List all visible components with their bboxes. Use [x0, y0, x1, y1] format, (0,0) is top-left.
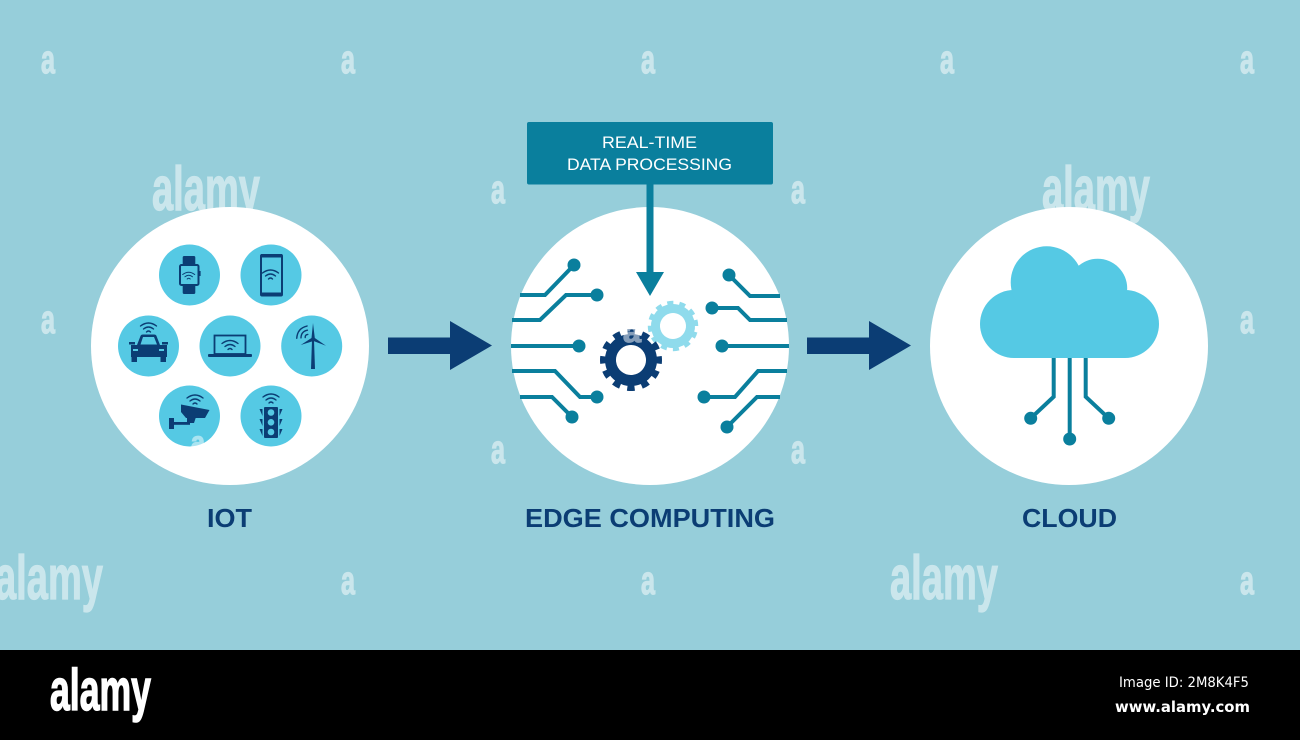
watermarks: a [191, 426, 205, 459]
watermarks [0, 38, 1254, 613]
icon: connected car [118, 316, 179, 376]
watermarks behind circles: alamy [152, 155, 260, 224]
circuit lines right [698, 268, 789, 434]
panel: IoT circle [91, 207, 369, 485]
icon: laptop [200, 316, 260, 376]
watermarks: a [940, 38, 954, 82]
icon: traffic light [240, 386, 302, 446]
icon: dark gear [600, 329, 662, 391]
watermarks behind circles [152, 155, 1150, 224]
watermarks: a [1240, 559, 1254, 603]
watermarks: a [341, 38, 355, 82]
watermarks: alamy [0, 544, 103, 613]
footer bar [0, 650, 1300, 740]
watermarks: a [623, 316, 641, 349]
cloud connectors [1024, 358, 1115, 446]
arrow: callout to gears [636, 184, 664, 296]
label: edge computing: EDGE COMPUTING [525, 503, 775, 533]
icon: security camera [159, 386, 220, 446]
label: cloud: CLOUD [1022, 503, 1117, 533]
icon: smartphone [240, 244, 302, 306]
watermarks: a [341, 559, 355, 603]
callout: real-time data processing: DATA PROCESSING [567, 155, 732, 174]
watermarks: alamy [890, 544, 998, 613]
watermarks: a [641, 559, 655, 603]
footer logo: alamy [50, 658, 151, 723]
callout: real-time data processing: REAL-TIME [602, 133, 697, 152]
arrow: edge to cloud [807, 321, 911, 370]
arrow: IoT to edge [388, 321, 492, 370]
icon: light gear [645, 298, 701, 354]
watermarks: a [1240, 38, 1254, 82]
callout: real-time data processing [527, 122, 773, 184]
watermarks behind circles: alamy [1042, 155, 1150, 224]
icon: smartwatch [159, 244, 220, 306]
panel: edge computing circle [511, 207, 789, 485]
watermarks: a [41, 38, 55, 82]
watermarks: a [491, 168, 505, 212]
label: IoT: IOT [207, 503, 252, 533]
watermarks: a [641, 38, 655, 82]
footer image id: Image ID: 2M8K4F5 [1119, 675, 1249, 691]
circuit lines left [511, 258, 604, 424]
watermarks: a [491, 428, 505, 472]
footer website: www.alamy.com [1115, 698, 1250, 716]
icon: cloud [980, 246, 1159, 358]
watermarks: a [791, 428, 805, 472]
icon: wind turbine [281, 316, 342, 376]
panel: cloud circle [930, 207, 1208, 485]
watermarks: a [41, 298, 55, 342]
watermarks: a [1240, 298, 1254, 342]
watermarks: a [791, 168, 805, 212]
